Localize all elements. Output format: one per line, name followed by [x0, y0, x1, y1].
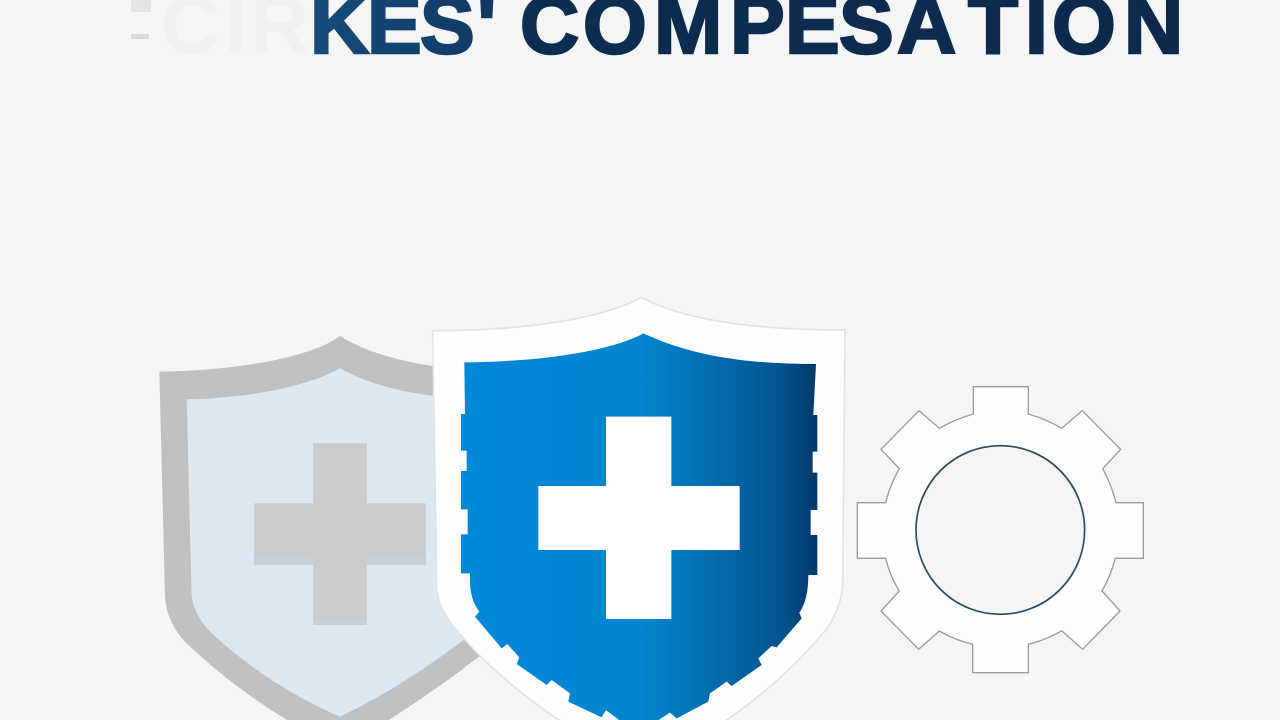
icon: gear [857, 387, 1143, 673]
shield white border [433, 297, 845, 720]
cross [254, 443, 426, 625]
shield outer border [159, 336, 483, 720]
gear centre ring [916, 446, 1085, 614]
shield blue face [461, 333, 817, 720]
icon: main blue shield with cross [433, 297, 845, 720]
shield inner fill [187, 368, 470, 717]
white cross [538, 417, 740, 619]
icon: faded shield with cross [159, 336, 483, 720]
gear outline [857, 387, 1143, 673]
